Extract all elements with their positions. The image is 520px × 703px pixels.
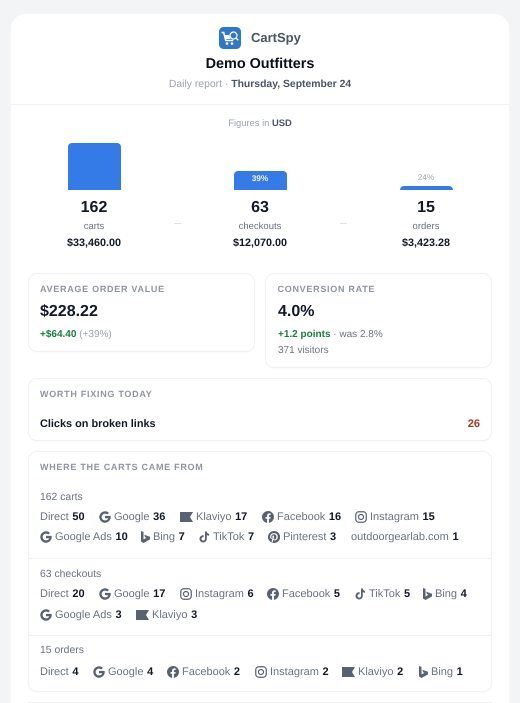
group: carts xyxy=(28,482,490,559)
source: Bing xyxy=(141,531,185,543)
source: Facebook xyxy=(262,510,341,523)
source: Google: 17 xyxy=(153,588,165,600)
source: Bing: 7 xyxy=(179,531,185,543)
source: Google: 36 xyxy=(153,510,165,522)
source: Google Ads xyxy=(40,531,128,543)
percent: orders: 24% xyxy=(418,172,434,182)
source: Facebook: Facebook xyxy=(182,666,230,678)
panel: conversion rate xyxy=(265,273,492,368)
source: TikTok: TikTok xyxy=(213,531,244,543)
group label: 15 orders xyxy=(40,645,84,656)
icon: CartSpy logo xyxy=(219,27,241,49)
amount: carts: $33,460.00 xyxy=(67,237,121,249)
source: Instagram: Instagram xyxy=(270,666,319,678)
source: Instagram: Instagram xyxy=(195,588,244,600)
source: Klaviyo: Klaviyo xyxy=(152,608,187,620)
next panel, cut off at the page edge xyxy=(28,702,492,703)
source: outdoorgearlab.com: 1 xyxy=(452,531,459,543)
source: Google xyxy=(99,510,165,523)
source: Facebook xyxy=(167,666,240,678)
metric change: +1.2 points · was 2.8% xyxy=(278,328,383,340)
currency note: Figures in USD xyxy=(228,117,292,128)
source: Facebook: Facebook xyxy=(282,588,330,600)
source: Google xyxy=(93,666,154,678)
metric value: $228.22 xyxy=(40,302,98,320)
source: Google: Google xyxy=(114,510,149,522)
source: Facebook: 5 xyxy=(334,588,340,600)
heading: CONVERSION RATE xyxy=(278,284,375,294)
heading: WORTH FIXING TODAY xyxy=(40,389,152,399)
source: Bing: Bing xyxy=(431,666,453,678)
source: Klaviyo xyxy=(136,608,197,620)
source: Direct: 20 xyxy=(72,588,85,600)
source: Direct: Direct xyxy=(40,666,69,678)
funnel: checkouts xyxy=(233,171,287,249)
source: Google Ads xyxy=(40,608,122,621)
source: outdoorgearlab.com: outdoorgearlab.com xyxy=(351,531,449,543)
source: Bing: Bing xyxy=(153,531,175,543)
subtitle: Daily report · Thursday, September 24 xyxy=(169,79,351,90)
amount: checkouts: $12,070.00 xyxy=(233,237,287,249)
label: carts: carts xyxy=(84,220,104,232)
value: orders: 15 xyxy=(417,198,435,216)
source: Facebook: 2 xyxy=(234,666,240,678)
percent: checkouts: 39% xyxy=(252,172,268,182)
source: Klaviyo: Klaviyo xyxy=(358,666,393,678)
panel: worth fixing today xyxy=(28,378,492,441)
bar: orders xyxy=(400,186,453,190)
source: Instagram: 2 xyxy=(323,666,329,678)
heading: WHERE THE CARTS CAME FROM xyxy=(40,462,204,472)
source: Direct: Direct xyxy=(40,510,69,522)
source: Direct xyxy=(40,588,85,600)
source: Pinterest: 3 xyxy=(330,531,336,543)
source: Pinterest xyxy=(268,531,336,543)
source: Facebook: Facebook xyxy=(277,510,325,522)
source: Direct xyxy=(40,510,85,522)
label: orders: orders xyxy=(413,220,439,232)
source: Klaviyo xyxy=(342,666,403,678)
metric change: +$64.40 (+39%) xyxy=(40,328,112,340)
source: TikTok xyxy=(200,531,254,543)
source: Klaviyo: 17 xyxy=(235,510,247,522)
value: checkouts: 63 xyxy=(251,198,269,216)
arrow: carts to checkouts xyxy=(174,222,180,224)
source: TikTok: 7 xyxy=(248,531,254,543)
source: Facebook: 16 xyxy=(329,510,341,522)
source: Bing xyxy=(423,588,467,600)
heading: AVERAGE ORDER VALUE xyxy=(40,284,165,294)
source: TikTok: TikTok xyxy=(369,588,400,600)
panel: where the carts came from xyxy=(28,451,492,692)
source: Instagram xyxy=(355,510,435,523)
source: Direct: 50 xyxy=(72,510,85,522)
source: Google: 4 xyxy=(147,666,153,678)
title: Demo Outfitters xyxy=(206,56,314,72)
group label: 162 carts xyxy=(40,492,83,502)
amount: orders: $3,423.28 xyxy=(402,237,450,249)
arrow: checkouts to orders xyxy=(340,222,346,224)
funnel: orders xyxy=(400,172,453,249)
issue count: 26 xyxy=(468,418,480,430)
source: Bing: Bing xyxy=(435,588,457,600)
brand name: CartSpy xyxy=(251,30,301,44)
source: Bing xyxy=(419,666,463,678)
source: Google Ads: Google Ads xyxy=(55,608,112,620)
funnel: carts xyxy=(67,143,121,249)
group label: 63 checkouts xyxy=(40,568,101,580)
value: carts: 162 xyxy=(81,198,107,216)
source: Instagram: 6 xyxy=(248,588,254,600)
source: Klaviyo: Klaviyo xyxy=(196,510,231,522)
source: Google xyxy=(99,588,165,600)
group: orders xyxy=(40,645,463,678)
source: Klaviyo: 2 xyxy=(397,666,403,678)
source: Pinterest: Pinterest xyxy=(283,531,326,543)
source: Facebook xyxy=(267,588,340,600)
source: Direct: Direct xyxy=(40,588,69,600)
source: Bing: 1 xyxy=(457,666,463,678)
source: TikTok: 5 xyxy=(404,588,410,600)
source: Klaviyo: 3 xyxy=(191,608,197,620)
source: Instagram: 15 xyxy=(423,510,435,522)
group: checkouts xyxy=(28,559,490,636)
source: Direct: 4 xyxy=(72,666,78,678)
source: Google Ads: 10 xyxy=(115,531,128,543)
source: Bing: 4 xyxy=(461,588,467,600)
source: Google Ads: Google Ads xyxy=(55,531,112,543)
header xyxy=(11,14,509,104)
visitors: 371 visitors xyxy=(278,344,329,356)
source: Instagram xyxy=(180,588,254,600)
source: Instagram xyxy=(255,666,329,678)
panel: average order value xyxy=(28,273,254,352)
source: Instagram: Instagram xyxy=(370,510,419,522)
issue label: Clicks on broken links xyxy=(40,418,156,430)
bar: checkouts xyxy=(234,171,287,190)
metric value: 4.0% xyxy=(278,302,314,320)
source: Klaviyo xyxy=(180,510,247,522)
source: Google: Google xyxy=(114,588,149,600)
bar: carts xyxy=(68,143,121,190)
source: TikTok xyxy=(356,588,410,600)
source: Google Ads: 3 xyxy=(115,608,122,620)
source: Google: Google xyxy=(108,666,143,678)
label: checkouts: checkouts xyxy=(239,220,281,232)
